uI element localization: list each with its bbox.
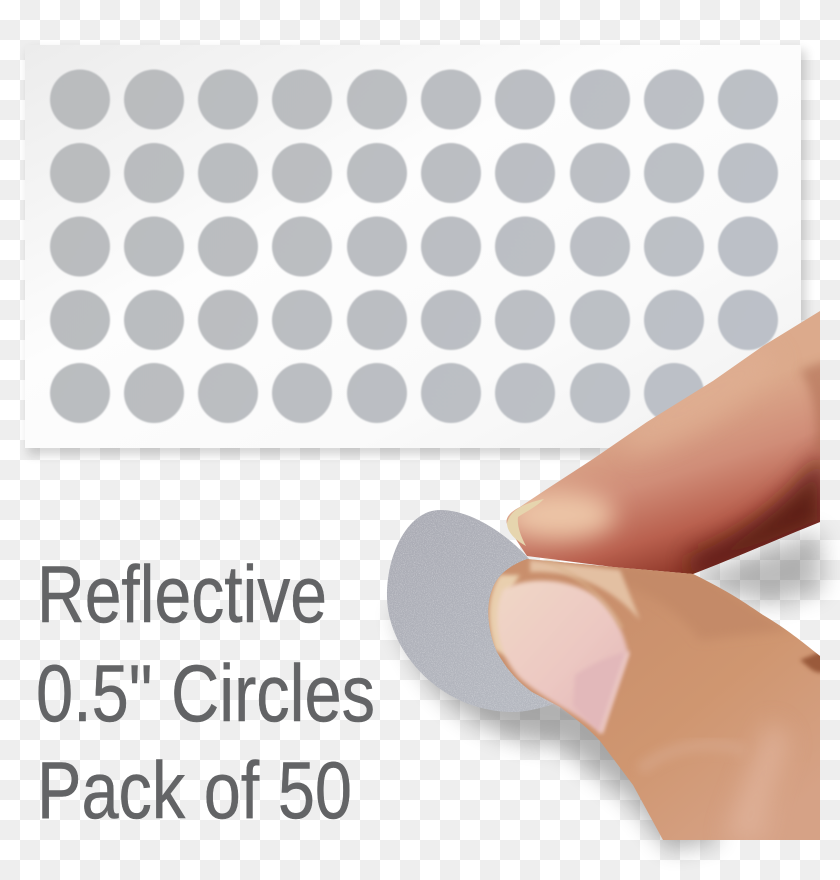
title text: Reflective 0.5" Circles Pack of 50: Pack of 50 xyxy=(37,746,352,836)
nail fold crease xyxy=(545,560,622,628)
panel: sticker sheet with reflective circles xyxy=(25,45,806,455)
skin fold highlights xyxy=(729,726,788,840)
sheet drop shadow xyxy=(28,50,806,455)
thumb tip warm band xyxy=(530,560,640,620)
index fingernail tip xyxy=(507,499,544,546)
thumbnail xyxy=(497,581,628,733)
thumb xyxy=(480,550,825,845)
title text: Reflective 0.5" Circles Pack of 50: 0.5" Circles xyxy=(36,649,375,739)
lunula xyxy=(573,652,628,733)
thumbnail side edge xyxy=(489,575,520,660)
deep shadow xyxy=(690,450,825,580)
title text: Reflective 0.5" Circles Pack of 50: Reflective xyxy=(37,550,327,640)
index finger xyxy=(506,311,820,574)
peeled reflective circle sticker xyxy=(387,510,560,712)
fingertip highlight xyxy=(505,491,615,539)
title text: Reflective 0.5" Circles Pack of 50 xyxy=(36,550,375,836)
hand and sticker drop shadows xyxy=(395,530,822,850)
grid of 50 reflective circles xyxy=(50,70,778,423)
sheet xyxy=(25,45,801,448)
